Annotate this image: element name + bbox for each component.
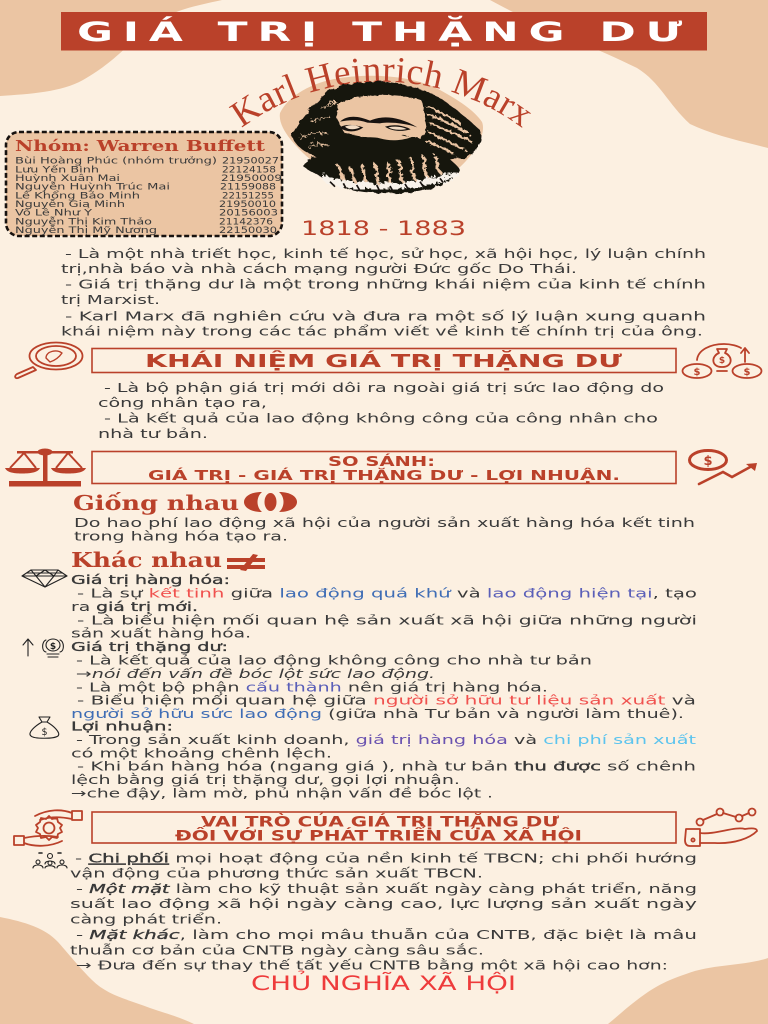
concept text block: nhà tư bản. bbox=[98, 426, 208, 441]
member list: 21159088 bbox=[220, 182, 276, 192]
title banner: GIÁ TRỊ THẶNG DƯ bbox=[77, 16, 692, 48]
heading box: so sánh: SO SÁNH: bbox=[328, 454, 435, 470]
text block: giá trị thặng dư: → nói đến vấn đề bóc lột sức lao động. bbox=[76, 666, 435, 681]
role text block: càng phát triển. bbox=[70, 912, 222, 926]
heading box: vai trò: VAI TRÒ CỦA GIÁ TRỊ THẶNG DƯ bbox=[201, 812, 559, 830]
icon: money bag: $ bbox=[41, 727, 48, 738]
text block: giá trị thặng dư: - Là một bộ phận cấu thành nên giá trị hàng hóa. bbox=[76, 680, 548, 694]
role text block: → Đưa đến sự thay thế tất yếu CNTB bằng một xã hội cao hơn: bbox=[76, 958, 668, 972]
text block: lợi nhuận: Lợi nhuận: bbox=[71, 718, 173, 734]
text block: giá trị hàng hóa: ra giá trị mới. bbox=[71, 599, 198, 614]
concept text block: - Là kết quả của lao động không công của công nhân cho bbox=[104, 410, 658, 426]
concept text block: công nhân tạo ra, bbox=[98, 395, 267, 410]
heading: giống nhau: Giống nhau bbox=[73, 491, 239, 515]
heading box: khái niệm: KHÁI NIỆM GIÁ TRỊ THẶNG DƯ bbox=[145, 350, 622, 372]
member list: 22151255 bbox=[222, 192, 274, 202]
icon: balance scales bbox=[5, 448, 86, 486]
concept text block: - Là bộ phận giá trị mới dôi ra ngoài giá trị sức lao động do bbox=[104, 380, 664, 395]
role text block: - Mặt khác , làm cho mọi mâu thuẫn của CNTB, đặc biệt là mâu bbox=[76, 927, 697, 942]
member list: 21142376 bbox=[219, 218, 273, 228]
member list: 22124158 bbox=[222, 166, 276, 176]
text block: lợi nhuận: lệch bằng giá trị thặng dư, gọi lợi nhuận. bbox=[71, 772, 460, 787]
text block: lợi nhuận: có một khoảng chênh lệch. bbox=[71, 746, 332, 760]
heading box: vai trò: ĐỐI VỚI SỰ PHÁT TRIỂN CỦA XÃ HỘI bbox=[175, 824, 582, 844]
text block: giá trị thặng dư: - Là kết quả của lao động không công cho nhà tư bản bbox=[76, 652, 592, 668]
heading: khác nhau: Khác nhau bbox=[71, 548, 222, 572]
icon: overlapping circles bbox=[244, 492, 297, 512]
blob: bottom left bbox=[0, 917, 194, 1024]
heading box: so sánh: GIÁ TRỊ - GIÁ TRỊ THẶNG DƯ - LỢI NHUẬN. bbox=[148, 468, 620, 484]
blob: top left bbox=[0, 0, 222, 96]
intro text block: - Giá trị thặng dư là một trong những khái niệm của kinh tế chính bbox=[65, 276, 706, 292]
text block: lợi nhuận: →che đậy, làm mờ, phủ nhận vấn đề bóc lột . bbox=[71, 786, 493, 800]
member list: 20156003 bbox=[219, 208, 278, 218]
heading box: so sánh bbox=[92, 452, 676, 484]
portrait: Karl Marx engraving bbox=[292, 82, 481, 194]
intro text block: - Là một nhà triết học, kinh tế học, sử học, xã hội học, lý luận chính bbox=[65, 246, 706, 261]
icon: diamond bbox=[22, 570, 67, 587]
text block: giá trị hàng hóa: sản xuất hàng hóa. bbox=[71, 626, 251, 640]
text block: lợi nhuận: - Trong sản xuất kinh doanh, giá trị hàng hóa và chi phí sản xuất bbox=[76, 732, 696, 747]
icon: arrow up and coin bbox=[23, 639, 63, 657]
member list bbox=[15, 156, 282, 236]
heading box: khái niệm bbox=[92, 348, 676, 372]
name arc: Karl Heinrich Marx: Karl Heinrich Marx bbox=[228, 58, 531, 128]
member list: Lưu Yến Bình bbox=[15, 164, 99, 176]
text block: giá trị thặng dư: Giá trị thặng dư: bbox=[71, 639, 228, 654]
intro text block: - Karl Marx đã nghiên cứu và đưa ra một số lý luận xung quanh bbox=[65, 308, 706, 324]
member list: Nguyễn Thị Kim Thảo bbox=[15, 216, 152, 228]
icon: coin with growth arrow bbox=[690, 450, 757, 484]
icon: arrow up and coin: $ bbox=[50, 642, 56, 652]
similarity text: trong hàng hóa tạo ra. bbox=[74, 528, 288, 544]
blob: top right bbox=[490, 0, 768, 148]
role text block: thuẫn cơ bản của CNTB ngày càng sâu sắc. bbox=[70, 942, 484, 958]
intro text block: khái niệm này trong các tác phẩm viết về kinh tế chính trị của ông. bbox=[61, 324, 703, 338]
similarity text bbox=[74, 515, 695, 544]
icon: not equal bbox=[227, 554, 265, 571]
member list: Nguyễn Huỳnh Trúc Mai bbox=[15, 182, 170, 192]
text block: giá trị hàng hóa: Giá trị hàng hóa: bbox=[71, 572, 230, 587]
member list: Huỳnh Xuân Mai bbox=[15, 174, 120, 184]
icon: coin with growth arrow: $ bbox=[703, 454, 713, 469]
group title: Nhóm: Warren Buffett bbox=[15, 137, 265, 155]
member list: Lê Khổng Bảo Minh bbox=[15, 190, 140, 202]
member list: Bùi Hoàng Phúc (nhóm trưởng) bbox=[15, 156, 217, 166]
years: 1818 - 1883 bbox=[301, 217, 466, 240]
intro text block: trị Marxist. bbox=[61, 292, 160, 307]
role text block: - Chi phối mọi hoạt động của nền kinh tế TBCN; chi phối hướng bbox=[75, 850, 697, 866]
icon: money bags and coins: $ bbox=[744, 367, 751, 378]
icon: money bags and coins: $ bbox=[694, 367, 701, 378]
member list: Võ Lê Như Ý bbox=[15, 206, 93, 218]
text block: giá trị thặng dư bbox=[71, 639, 696, 721]
conclusion: chủ nghĩa xã hội: CHỦ NGHĨA XÃ HỘI bbox=[251, 970, 516, 995]
icon: money bags and coins bbox=[682, 344, 762, 378]
text block: giá trị hàng hóa bbox=[71, 572, 697, 640]
similarity text: Do hao phí lao động xã hội của người sản xuất hàng hóa kết tinh bbox=[74, 515, 695, 530]
member list: 22150030 bbox=[219, 226, 278, 236]
role text block: - Một mặt làm cho kỹ thuật sản xuất ngày càng phát triển, năng bbox=[76, 881, 697, 896]
icon: hands and gear bbox=[14, 810, 82, 846]
heading box: vai trò bbox=[92, 812, 676, 844]
text block: giá trị hàng hóa: - Là biểu hiện mối quan hệ sản xuất xã hội giữa những người bbox=[77, 612, 697, 628]
member list: 21950010 bbox=[219, 200, 277, 210]
icon: hand with network chart bbox=[685, 808, 757, 846]
text block: giá trị thặng dư: - Biểu hiện mối quan hệ giữa người sở hữu tư liệu sản xuất và bbox=[77, 692, 696, 708]
icon: money bag bbox=[30, 717, 59, 738]
text block: giá trị hàng hóa: - Là sự kết tinh giữa lao động quá khứ và lao động hiện tại , tạo bbox=[77, 586, 697, 600]
text block: lợi nhuận bbox=[71, 718, 696, 800]
intro text block bbox=[61, 246, 706, 338]
icon: people group bbox=[33, 853, 67, 868]
group panel: Nhóm Warren Buffett bbox=[6, 132, 282, 236]
text block: lợi nhuận: - Khi bán hàng hóa (ngang giá ), nhà tư bản thu được số chênh bbox=[77, 758, 696, 774]
icon: magnifier with lightbulb bbox=[15, 342, 82, 378]
portrait backdrop bbox=[280, 76, 483, 183]
role text block bbox=[70, 850, 697, 972]
title banner bbox=[61, 12, 707, 50]
blob: bottom right bbox=[608, 958, 768, 1024]
role text block: vận động của phương thức sản xuất TBCN. bbox=[70, 866, 483, 880]
icon: money bags and coins: $ bbox=[719, 356, 725, 366]
member list: 21950009 bbox=[221, 174, 282, 184]
role text block: suất lao động xã hội ngày càng cao, lực lượng sản xuất ngày bbox=[70, 896, 697, 911]
member list: Nguyễn Gia Minh bbox=[15, 199, 125, 210]
intro text block: trị,nhà báo và nhà cách mạng người Đức gốc Do Thái. bbox=[61, 261, 577, 276]
member list: 21950027 bbox=[222, 156, 279, 166]
concept text block bbox=[98, 380, 664, 441]
member list: Nguyễn Thị Mỹ Nương bbox=[15, 225, 157, 236]
text block: giá trị thặng dư: người sở hữu sức lao động (giữa nhà Tư bản và người làm thuê). bbox=[71, 706, 684, 721]
